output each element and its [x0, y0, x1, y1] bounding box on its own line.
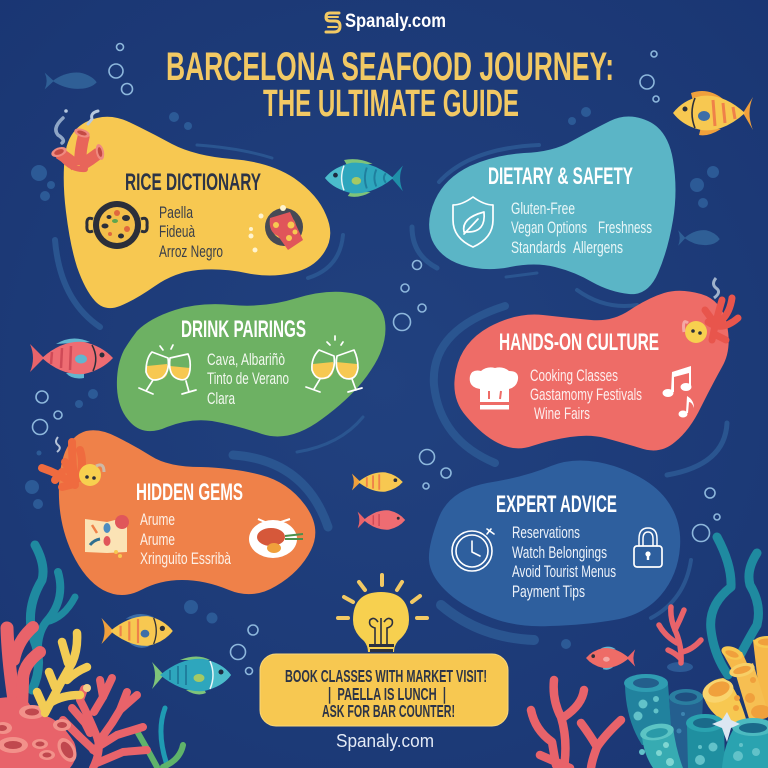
fish: small red right	[586, 647, 635, 670]
bubbles	[25, 44, 720, 674]
callout: tips: BOOK CLASSES WITH MARKET VISIT!	[285, 666, 487, 686]
list: Arume	[140, 530, 175, 549]
fish: dim top left	[45, 72, 97, 89]
list: Reservations	[512, 523, 580, 542]
brand name: Spanaly.com	[345, 11, 446, 32]
teal blob	[429, 116, 676, 294]
coral blob	[454, 291, 729, 450]
icon: S logo	[326, 13, 340, 32]
fish: yellow top right	[673, 91, 753, 135]
list: Standards	[511, 238, 566, 257]
icon: chef hat	[470, 367, 518, 410]
panel: expert advice	[429, 460, 680, 626]
heading: RICE DICTIONARY	[125, 169, 261, 196]
list: Cooking Classes	[530, 366, 618, 385]
panel: drink pairings	[117, 292, 385, 436]
fish: red left	[30, 338, 113, 378]
list: Xringuito Essribà	[140, 549, 231, 568]
footer brand: Spanaly.com	[336, 731, 434, 751]
fish: small yellow	[352, 472, 403, 492]
fish: small coral	[358, 510, 405, 530]
heading: HIDDEN GEMS	[136, 479, 243, 506]
list: Cava, Albariñò	[207, 350, 285, 369]
coral: pink centre	[63, 678, 147, 768]
title: THE ULTIMATE GUIDE	[263, 83, 519, 125]
list: Avoid Tourist Menus	[512, 562, 616, 581]
list: Vegan Options	[511, 218, 587, 237]
orange blob	[59, 430, 315, 595]
decoration: coral critter right	[684, 278, 738, 343]
panel: hands-on culture	[454, 291, 729, 450]
decoration: shrimp tubes top left	[50, 109, 106, 169]
icon: light bulb	[338, 575, 427, 652]
icon: shield with leaf	[453, 197, 493, 247]
panel: hidden gems	[59, 430, 315, 595]
list	[511, 199, 652, 257]
list: Clara	[207, 389, 235, 408]
yellow blob	[64, 117, 330, 308]
icon: seafood plate	[249, 519, 303, 558]
decoration: orange coral critter	[42, 437, 104, 487]
callout: tips: ASK FOR BAR COUNTER!	[322, 701, 455, 721]
green blob	[117, 292, 385, 436]
icon: clinking glasses right	[306, 336, 362, 392]
blue blob	[429, 460, 680, 626]
coral: yellow	[37, 633, 87, 713]
fish: teal centre	[325, 159, 403, 197]
heading: EXPERT ADVICE	[496, 491, 617, 518]
icon: music notes	[662, 366, 694, 418]
fish: dim right	[678, 230, 720, 246]
panel: dietary and safety	[429, 116, 676, 294]
list: Watch Belongings	[512, 543, 607, 562]
title	[166, 45, 614, 125]
heading: DRINK PAIRINGS	[181, 316, 306, 343]
list: Wine Fairs	[534, 404, 590, 423]
list: Payment Tips	[512, 582, 585, 601]
list: Freshness	[598, 218, 652, 237]
list	[530, 366, 642, 423]
icon: paella pan	[87, 201, 147, 249]
list	[512, 523, 616, 601]
heading: DIETARY & SAFETY	[488, 163, 633, 190]
fish: teal bottom left	[152, 656, 231, 694]
list: Fideuà	[159, 222, 195, 241]
icon: stopwatch	[452, 529, 494, 571]
icon: treasure map	[85, 515, 129, 558]
sponges: yellow	[699, 636, 768, 722]
icon: padlock	[634, 528, 662, 567]
seaweed right	[711, 537, 758, 675]
callout: tips: | PAELLA IS LUNCH |	[328, 684, 446, 704]
list: Gastamomy Festivals	[530, 385, 642, 404]
coral: pink tubes base	[0, 697, 80, 768]
logo header	[326, 11, 446, 32]
list: Arume	[140, 510, 175, 529]
list: Gluten-Free	[511, 199, 575, 218]
list	[140, 510, 231, 568]
callout: tips	[260, 654, 508, 726]
coral: left pink branches	[7, 627, 40, 708]
list: Tinto de Verano	[207, 369, 289, 388]
panel: rice dictionary	[64, 117, 330, 308]
list: Paella	[159, 203, 193, 222]
list: Arroz Negro	[159, 242, 223, 261]
icon: clinking glasses left	[139, 345, 196, 394]
list: Allergens	[573, 238, 623, 257]
list	[159, 203, 223, 261]
seaweed left	[30, 545, 183, 767]
coral: small with base	[659, 607, 701, 672]
sponges: teal tubes	[624, 674, 768, 768]
heading: HANDS-ON CULTURE	[499, 329, 659, 356]
list	[207, 350, 289, 408]
coral: bottom centre right	[531, 680, 621, 768]
icon: red tile dish	[248, 205, 303, 252]
fish: yellow bottom left	[101, 614, 173, 648]
